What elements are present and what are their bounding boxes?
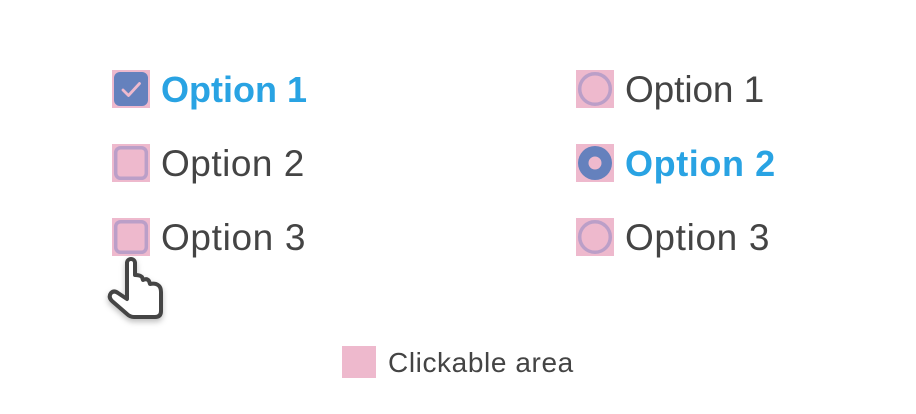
checkbox option 1 (checked): Option 1 — [161, 69, 307, 110]
legend: clickable area: Clickable area — [388, 347, 574, 378]
checkbox option 3: Option 3 — [161, 217, 306, 258]
checkbox option 2: Option 2 — [161, 143, 305, 184]
radio option 1: Option 1 — [625, 69, 764, 110]
icon: hand cursor — [110, 259, 161, 317]
radio option 3: Option 3 — [625, 217, 770, 258]
radio option 2 (selected): Option 2 — [625, 143, 776, 184]
